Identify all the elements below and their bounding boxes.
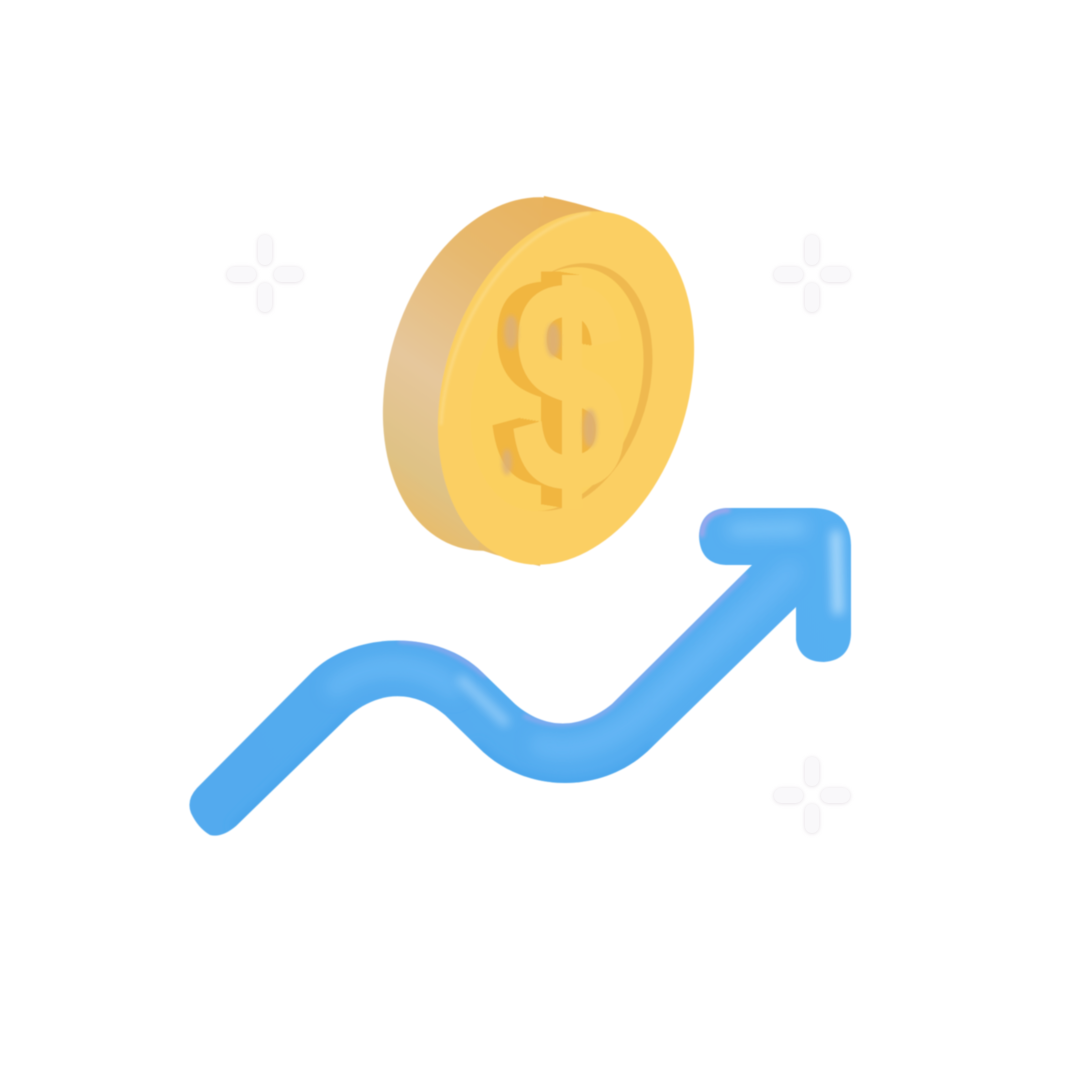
illustration: coin with rising arrow bbox=[188, 195, 852, 836]
sparkle: bottom right bbox=[774, 757, 850, 833]
coin rim bbox=[341, 165, 681, 583]
arrow ridge highlight bbox=[462, 680, 505, 722]
sparkle: top right bbox=[774, 235, 850, 312]
coin inner recess bbox=[442, 241, 681, 533]
arrow head highlight top bbox=[735, 528, 800, 530]
arrow shading bbox=[236, 510, 838, 826]
rising arrow bbox=[189, 508, 851, 836]
arrow core glow bbox=[335, 572, 790, 748]
dollar sign bbox=[492, 271, 623, 508]
arrow purple edge: head bbox=[702, 510, 728, 535]
arrow purple edge: trough bbox=[525, 575, 745, 724]
coin bbox=[382, 195, 695, 566]
dollar sign: $ bbox=[512, 220, 626, 554]
arrow purple edge: hump bbox=[400, 641, 485, 676]
arrow underside shading bbox=[236, 715, 652, 826]
coin face edge highlight bbox=[441, 213, 590, 425]
sparkle: top left bbox=[227, 235, 303, 312]
coin face bbox=[396, 179, 736, 597]
dollar sign tan shading bbox=[502, 315, 597, 475]
arrow head highlight right bbox=[836, 535, 838, 610]
arrow body bbox=[189, 508, 851, 836]
